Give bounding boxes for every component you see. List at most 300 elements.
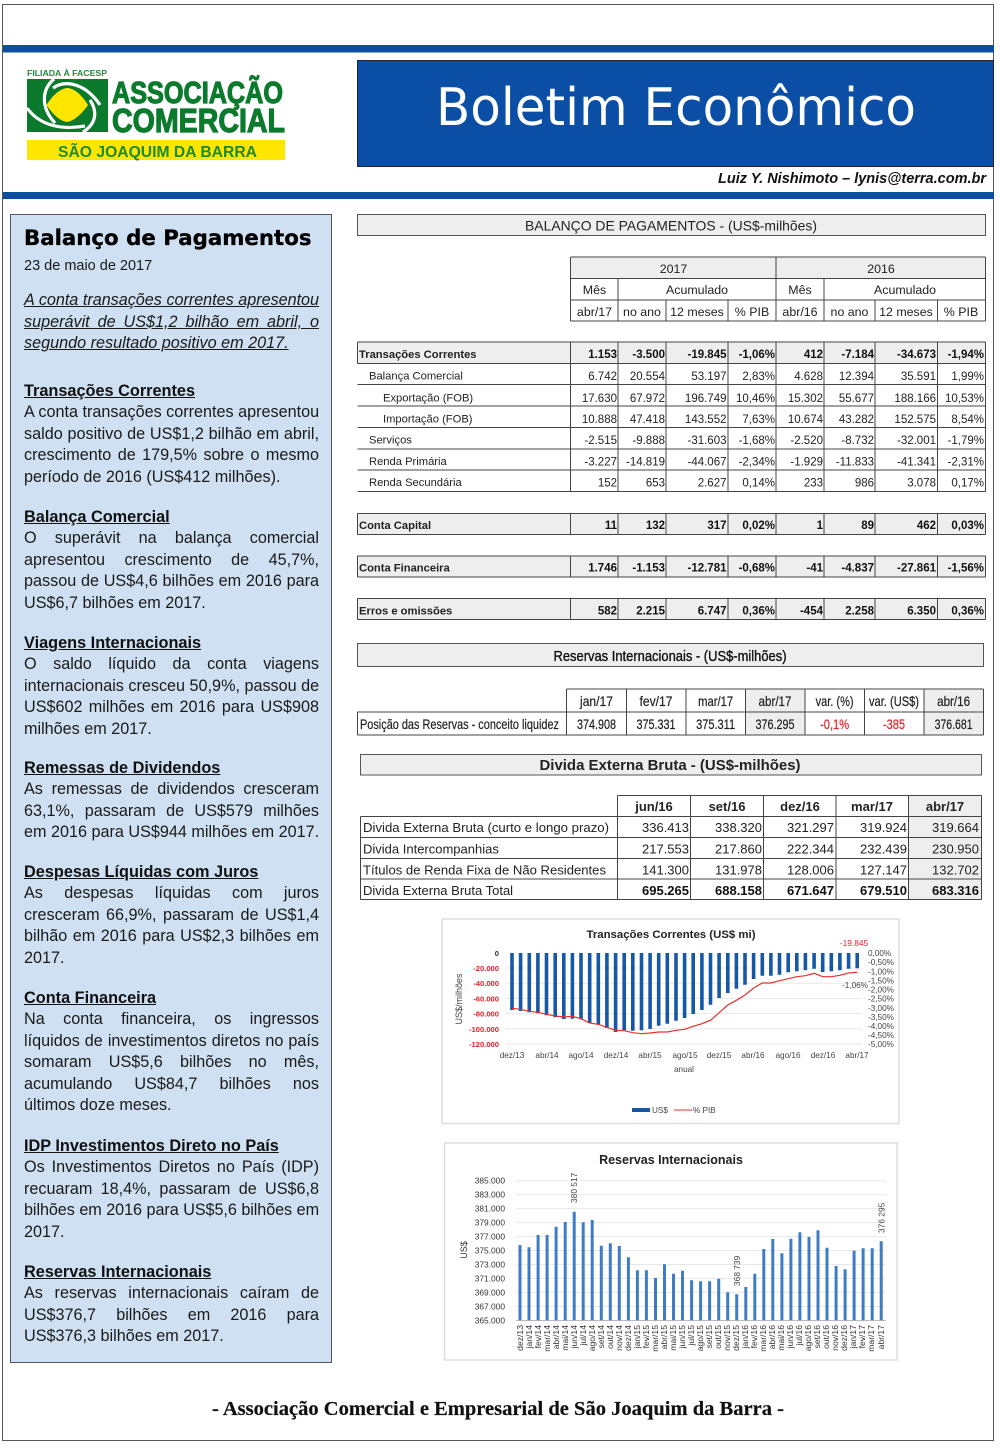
table: transações correntes: 10,46%: [736, 393, 775, 405]
table: dívida externa bruta: 127.147: [860, 862, 907, 878]
x axis month labels: ago/16: [803, 1325, 813, 1351]
right axis labels: -1,50%: [868, 976, 894, 985]
x axis month labels: mai/14: [560, 1325, 570, 1351]
table: dívida externa bruta: 141.300: [642, 862, 689, 878]
x axis month labels: abr/15: [659, 1325, 669, 1349]
x axis month labels: mar/15: [650, 1325, 660, 1352]
x axis labels: dez/13: [500, 1051, 525, 1060]
legend: [632, 1106, 716, 1115]
table: posição das reservas: 376.295: [756, 716, 795, 732]
x axis month labels: dez/13: [515, 1325, 525, 1351]
x axis month labels: dez/14: [623, 1325, 633, 1351]
data labels: 368 739: [732, 1255, 742, 1286]
heading: Reservas Internacionais table: [358, 644, 984, 666]
table row: conta financeira: Conta Financeira: [359, 562, 451, 574]
top blue rule: [3, 45, 994, 52]
table: dívida externa bruta: Títulos de Renda Fixa de Não Residentes: [363, 862, 607, 878]
logo name: ASSOCIAÇÃO: [112, 75, 283, 110]
text block: conta financeira: líquidos de investimentos diretos no país: [24, 1032, 319, 1050]
x axis month labels: [515, 1325, 886, 1352]
left axis labels: -120.000: [469, 1040, 499, 1049]
table: balanço de pagamentos column headers: abr/16: [782, 305, 818, 319]
table row: conta capital: 0,03%: [951, 520, 984, 532]
title banner: Boletim Econômico: [436, 78, 916, 138]
axis title: US$: [459, 1241, 469, 1259]
x axis labels: ago/15: [672, 1051, 698, 1060]
x axis month labels: jan/15: [632, 1325, 642, 1349]
table: dívida externa bruta: 230.950: [932, 842, 979, 856]
text block: balança comercial: US$6,7 bilhões em 2017.: [24, 594, 206, 612]
table row: conta capital: [358, 514, 986, 534]
text block: viagens internacionais: internacionais cresceu 50,9%, passou de: [24, 677, 319, 695]
text block: conta financeira: Na conta financeira, os ingressos: [24, 1010, 319, 1028]
panel: balanço de pagamentos summary: [10, 214, 332, 1363]
x axis month labels: out/14: [605, 1325, 615, 1349]
row: transações correntes values: -19.845: [687, 349, 727, 361]
table: dívida externa bruta: 321.297: [787, 820, 834, 835]
table: transações correntes: -9.888: [632, 435, 665, 447]
table row: erros e omissões: 2.258: [845, 606, 875, 618]
table: posição das reservas: abr/16: [937, 693, 970, 709]
table: transações correntes: 653: [646, 478, 665, 490]
table: transações correntes: 143.552: [685, 414, 726, 426]
table: transações correntes: 53.197: [691, 371, 726, 383]
right axis labels: [868, 949, 894, 1049]
table: transações correntes: -1,79%: [948, 435, 984, 447]
data labels: 376 295: [876, 1202, 886, 1233]
text block: IDP: 2017.: [24, 1223, 65, 1241]
table: transações correntes: 233: [804, 478, 823, 490]
x axis labels: abr/17: [845, 1051, 869, 1060]
table: balanço de pagamentos column headers: 2016: [867, 262, 895, 276]
y axis labels: 375.000: [475, 1246, 505, 1256]
chart: transações correntes: -1,06%: [842, 981, 868, 990]
axis title: US$/milhões: [454, 973, 464, 1025]
table: balanço de pagamentos column headers: Mês: [788, 283, 812, 297]
row: transações correntes values: -1,06%: [739, 349, 775, 361]
table: dívida externa bruta: [360, 796, 982, 900]
text block: reservas internacionais: Reservas Internacionais: [24, 1262, 211, 1280]
table: posição das reservas: fev/17: [640, 693, 673, 709]
table: transações correntes: -41.341: [897, 456, 936, 468]
x axis month labels: abr/14: [551, 1325, 561, 1349]
text block: conta financeira: [24, 988, 319, 1114]
text block: conta financeira: Conta Financeira: [24, 988, 156, 1006]
chart title: Transações Correntes (US$ mi): [586, 929, 756, 941]
lower blue rule: [3, 192, 994, 199]
table: dívida externa bruta: 232.439: [860, 842, 907, 856]
x axis labels: ago/14: [568, 1051, 594, 1060]
left axis labels: -60.000: [473, 994, 499, 1004]
table: balanço de pagamentos column headers: Mês: [583, 283, 606, 297]
rows: components: Serviços: [369, 434, 412, 446]
table: transações correntes: 43.282: [839, 414, 874, 426]
line: % PIB: [512, 972, 857, 1034]
text block: despesas líquidas com juros: Despesas Líquidas com Juros: [24, 862, 258, 880]
text block: viagens internacionais: O saldo líquido da conta viagens: [24, 655, 319, 673]
y axis labels: 369.000: [475, 1288, 505, 1298]
table row: erros e omissões: 6.747: [698, 606, 726, 618]
chart title: Reservas Internacionais: [599, 1153, 743, 1167]
text block: transações correntes: saldo positivo de US$1,2 bilhão em abril,: [24, 425, 319, 443]
row: transações correntes values: 1.153: [588, 349, 617, 361]
x axis month labels: nov/15: [722, 1325, 732, 1351]
text block: transações correntes: período de 2016 (US$412 milhões).: [24, 468, 280, 486]
table: balanço de pagamentos column headers: Acumulado: [666, 283, 728, 297]
x axis month labels: mar/16: [758, 1325, 768, 1352]
table: transações correntes: -14.819: [626, 456, 665, 468]
x axis month labels: fev/16: [749, 1325, 759, 1348]
text block: conta financeira: somaram US$5,6 bilhões no mês,: [24, 1053, 319, 1071]
table: dívida externa bruta: set/16: [709, 799, 745, 814]
table: transações correntes: 10.888: [582, 414, 617, 426]
right axis labels: -3,50%: [868, 1013, 894, 1022]
table row: conta capital: 132: [646, 520, 665, 532]
bars: reserves: [520, 1212, 881, 1320]
table: dívida externa bruta: 336.413: [642, 820, 689, 835]
table row: conta financeira: -0,68%: [739, 562, 775, 574]
rows: components: [369, 370, 473, 489]
y axis labels: 367.000: [475, 1302, 505, 1312]
text block: remessas de dividendos: Remessas de Dividendos: [24, 758, 220, 776]
table: balanço de pagamentos column headers: % PIB: [735, 305, 769, 319]
table: transações correntes: 2.627: [698, 478, 726, 490]
x axis month labels: mai/15: [668, 1325, 678, 1351]
x axis labels: dez/15: [707, 1051, 732, 1060]
text block: viagens internacionais: [24, 634, 319, 738]
author byline: Luiz Y. Nishimoto – lynis@terra.com.br: [718, 171, 987, 187]
text block: balança comercial: [24, 508, 319, 612]
table row: conta capital: 462: [917, 520, 936, 532]
table: posição das reservas: 375.331: [636, 716, 676, 732]
table: transações correntes: Transações Correntes: [359, 349, 477, 361]
table row: erros e omissões: Erros e omissões: [359, 606, 452, 618]
table: dívida externa bruta: 338.320: [715, 820, 762, 835]
x axis month labels: out/15: [713, 1325, 723, 1349]
table row: conta financeira: [358, 556, 986, 577]
table: transações correntes: 67.972: [630, 393, 665, 405]
text block: balança comercial: passou de US$4,6 bilhões em 2016 para: [24, 572, 319, 590]
table: balanço de pagamentos column headers: Acumulado: [874, 283, 936, 297]
heading: Balanço de Pagamentos table: BALANÇO DE PAGAMENTOS - (US$-milhões): [525, 218, 817, 234]
table row: conta financeira: -1,56%: [948, 562, 984, 574]
text block: conta financeira: acumulando US$84,7 bilhões nos: [24, 1075, 319, 1093]
x axis month labels: nov/16: [830, 1325, 840, 1351]
table: dívida externa bruta: 131.978: [715, 862, 762, 878]
data callouts: -19.845: [840, 938, 869, 948]
table row: conta capital: 89: [861, 520, 874, 532]
left axis labels: -80.000: [473, 1010, 499, 1018]
x axis labels: [500, 1051, 869, 1074]
text block: transações correntes: [24, 382, 319, 486]
table: transações correntes: -32.001: [897, 435, 936, 447]
y axis labels: 381.000: [475, 1204, 505, 1214]
table: dívida externa bruta: 222.344: [787, 842, 834, 856]
table: transações correntes: 4.628: [794, 371, 823, 383]
table row: conta financeira: -12.781: [687, 562, 727, 574]
title banner: [358, 60, 994, 166]
chart: reservas internacionais: [444, 1143, 897, 1360]
table: dívida externa bruta: dez/16: [780, 799, 820, 814]
table: dívida externa bruta: Divida Externa Bruta (curto e longo prazo): [363, 820, 609, 835]
x axis labels: dez/14: [604, 1051, 629, 1060]
table row: erros e omissões: 6.350: [907, 606, 936, 618]
x axis month labels: out/16: [821, 1325, 831, 1349]
table row: conta financeira: -27.861: [897, 562, 937, 574]
table: transações correntes: -3.227: [584, 456, 617, 468]
text block: transações correntes: Transações Correntes: [24, 382, 195, 400]
table row: conta financeira: 1.746: [588, 562, 617, 574]
x axis month labels: jul/16: [794, 1325, 804, 1347]
x axis month labels: ago/15: [695, 1325, 705, 1351]
table: transações correntes: -2,31%: [948, 456, 984, 468]
logo: Associação Comercial: [27, 69, 285, 161]
x axis month labels: mar/14: [542, 1325, 552, 1352]
heading: Divida Externa Bruta table: [360, 754, 982, 775]
right axis labels: -0,50%: [868, 958, 894, 967]
text block: balança comercial: apresentou crescimento de 45,7%,: [24, 551, 319, 569]
x axis labels: abr/15: [638, 1051, 662, 1060]
y axis labels: 379.000: [475, 1218, 505, 1228]
text block: remessas de dividendos: As remessas de dividendos cresceram: [24, 780, 319, 798]
table row: erros e omissões: 0,36%: [951, 606, 984, 618]
table: balanço de pagamentos column headers: abr/17: [577, 305, 612, 319]
logo city band: [27, 140, 285, 161]
x axis month labels: fev/15: [641, 1325, 651, 1348]
right axis labels: 0,00%: [868, 949, 891, 958]
text block: reservas internacionais: As reservas internacionais caíram de: [24, 1284, 319, 1302]
table: transações correntes: 10,53%: [945, 393, 984, 405]
table: transações correntes: -2,34%: [739, 456, 775, 468]
table row: erros e omissões: 582: [598, 606, 617, 618]
x axis month labels: jun/14: [569, 1325, 579, 1349]
logo city band: SÃO JOAQUIM DA BARRA: [58, 141, 257, 161]
x axis labels: anual: [674, 1065, 694, 1074]
table: transações correntes: 20.554: [630, 371, 666, 383]
row: transações correntes values: -1,94%: [948, 349, 984, 361]
rows: components: Renda Primária: [369, 456, 448, 468]
logo emblem: [27, 79, 108, 132]
right axis labels: -5,00%: [868, 1040, 894, 1049]
rows: components: Renda Secundária: [369, 477, 462, 489]
text block: IDP: [24, 1136, 319, 1241]
table: transações correntes: 15.302: [788, 393, 823, 405]
table: transações correntes: 12.394: [839, 371, 875, 383]
table: dívida externa bruta: 671.647: [787, 883, 834, 898]
text block: remessas de dividendos: [24, 758, 319, 841]
table: dívida externa bruta: 319.664: [932, 820, 979, 835]
table: dívida externa bruta: 679.510: [860, 883, 907, 898]
x axis month labels: mai/16: [776, 1325, 786, 1351]
text block: intro: segundo resultado positivo em 2017.: [24, 334, 289, 352]
table: posição das reservas: 376.681: [935, 716, 973, 732]
y axis labels: 365.000: [475, 1316, 505, 1326]
table: transações correntes: 0,17%: [951, 478, 984, 490]
table: transações correntes: 55.677: [839, 393, 874, 405]
data labels: 380 517: [569, 1172, 579, 1203]
text block: viagens internacionais: Viagens Internacionais: [24, 634, 201, 652]
x axis month labels: jul/14: [578, 1325, 588, 1347]
table: posição das reservas: mar/17: [698, 693, 733, 709]
text block: despesas líquidas com juros: As despesas líquidas com juros: [24, 884, 319, 902]
table: balanço de pagamentos column headers: no ano: [831, 305, 869, 319]
right axis labels: -1,00%: [868, 967, 894, 976]
table: dívida externa bruta: 217.860: [715, 842, 762, 856]
table: transações correntes: 196.749: [685, 393, 726, 405]
table: posição das reservas: [358, 689, 984, 735]
text block: IDP: bilhões em 2016 para US$5,6 bilhões em: [24, 1201, 319, 1219]
x axis month labels: dez/15: [731, 1325, 741, 1351]
table: dívida externa bruta: abr/17: [926, 799, 964, 814]
x axis labels: abr/16: [741, 1051, 765, 1060]
table row: erros e omissões: 0,36%: [742, 606, 775, 618]
table: transações correntes: 7,63%: [742, 414, 775, 426]
table row: conta financeira: -41: [806, 562, 824, 574]
x axis month labels: jul/15: [686, 1325, 696, 1347]
table: transações correntes: -1.929: [790, 456, 823, 468]
table row: conta capital: 0,02%: [742, 520, 775, 532]
x axis month labels: set/16: [812, 1325, 822, 1348]
rows: components: Importação (FOB): [383, 414, 473, 426]
text block: balança comercial: Balança Comercial: [24, 508, 170, 526]
legend: US$: [652, 1106, 668, 1115]
table: dívida externa bruta: mar/17: [851, 799, 893, 814]
left axis labels: -40.000: [473, 979, 499, 988]
table: balanço de pagamentos column headers: 12 meses: [670, 305, 724, 319]
text block: IDP: recuaram 18,4%, passaram de US$6,8: [24, 1180, 319, 1198]
table: transações correntes: 3.078: [907, 478, 936, 490]
x axis labels: dez/16: [811, 1051, 836, 1060]
table: transações correntes: 188.166: [894, 393, 936, 405]
table: balanço de pagamentos column headers: 2017: [660, 262, 687, 276]
rows: components: Balança Comercial: [369, 370, 463, 382]
logo affiliation text: FILIADA À FACESP: [27, 69, 108, 78]
text block: despesas líquidas com juros: bilhão em 2016 para US$2,3 bilhões em: [24, 927, 319, 945]
x axis month labels: jan/17: [848, 1325, 858, 1349]
footer: - Associação Comercial e Empresarial de São Joaquim da Barra -: [212, 1398, 784, 1420]
x axis month labels: ago/14: [587, 1325, 597, 1351]
text block: reservas internacionais: US$376,3 bilhões em 2017.: [24, 1327, 224, 1345]
x axis month labels: set/14: [596, 1325, 606, 1348]
table: transações correntes: [358, 342, 986, 492]
table: transações correntes: -44.067: [687, 456, 726, 468]
table: dívida externa bruta: 319.924: [860, 820, 907, 835]
table: transações correntes: 152.575: [894, 414, 936, 426]
table: posição das reservas: -0,1%: [820, 716, 849, 732]
table: transações correntes: -1,68%: [739, 435, 775, 447]
table: balanço de pagamentos column headers: no ano: [623, 305, 661, 319]
x axis month labels: dez/16: [839, 1325, 849, 1351]
row: transações correntes values: -7.184: [841, 349, 875, 361]
table: posição das reservas: abr/17: [758, 693, 792, 709]
table: posição das reservas: var. (US$): [869, 693, 919, 709]
table: transações correntes: -8.732: [841, 435, 874, 447]
table: balanço de pagamentos column headers: 12 meses: [879, 305, 933, 319]
table: transações correntes: 8,54%: [951, 414, 984, 426]
right axis labels: -2,50%: [868, 995, 894, 1004]
x axis month labels: mar/17: [866, 1325, 876, 1352]
table: posição das reservas: 375.311: [696, 716, 735, 732]
x axis month labels: abr/16: [767, 1325, 777, 1349]
table: posição das reservas: Posição das Reservas - conceito liquidez: [360, 716, 559, 732]
bars: US$: [512, 953, 857, 1032]
table: posição das reservas: jan/17: [579, 693, 613, 709]
y axis labels: 377.000: [475, 1232, 505, 1242]
table: balanço de pagamentos column headers: % PIB: [944, 305, 978, 319]
heading: Divida Externa Bruta table: Divida Externa Bruta - (US$-milhões): [540, 758, 801, 774]
heading: Reservas Internacionais table: Reservas Internacionais - (US$-milhões): [554, 649, 786, 665]
table row: erros e omissões: 2.215: [636, 606, 666, 618]
table: transações correntes: -11.833: [836, 456, 874, 468]
text block: remessas de dividendos: 63,1%, passaram de US$579 milhões: [24, 802, 319, 820]
left axis labels: 0: [495, 949, 499, 958]
table: dívida externa bruta: jun/16: [634, 799, 673, 814]
table: transações correntes: 1,99%: [951, 371, 984, 383]
table: dívida externa bruta: 128.006: [787, 862, 834, 878]
text block: transações correntes: crescimento de 179,5% sobre o mesmo: [24, 446, 319, 464]
x axis labels: abr/14: [535, 1051, 559, 1060]
table row: conta capital: Conta Capital: [359, 520, 431, 532]
y axis labels: 385.000: [475, 1176, 505, 1186]
table: dívida externa bruta: Divida Externa Bruta Total: [363, 883, 513, 898]
table row: conta capital: 317: [707, 520, 726, 532]
row: transações correntes values: 412: [804, 349, 823, 361]
row: transações correntes values: [588, 349, 984, 361]
table: transações correntes: -2.515: [584, 435, 617, 447]
text block: conta financeira: últimos doze meses.: [24, 1096, 172, 1114]
x axis month labels: set/15: [704, 1325, 714, 1348]
table: posição das reservas: 374.908: [577, 716, 616, 732]
table row: erros e omissões: [358, 598, 986, 620]
rows: components: Exportação (FOB): [383, 392, 473, 404]
y axis labels: 373.000: [475, 1260, 505, 1270]
text block: despesas líquidas com juros: [24, 862, 319, 967]
chart: transações correntes: [442, 919, 899, 1124]
table row: conta financeira: -1.153: [632, 562, 665, 574]
panel date: 23 de maio de 2017: [24, 258, 152, 274]
x axis month labels: jun/15: [677, 1325, 687, 1349]
data labels: [569, 1172, 886, 1286]
x axis month labels: nov/14: [614, 1325, 624, 1351]
right axis labels: -3,00%: [868, 1004, 894, 1013]
heading: Balanço de Pagamentos table: [358, 214, 986, 236]
table row: erros e omissões: -454: [800, 606, 824, 618]
table row: conta financeira: -4.837: [841, 562, 874, 574]
panel heading: Balanço de Pagamentos: [24, 226, 312, 250]
right axis labels: -4,50%: [868, 1031, 894, 1040]
text block: IDP: IDP Investimentos Direto no País: [24, 1136, 279, 1154]
text block: intro: A conta transações correntes apresentou: [24, 291, 319, 309]
x axis labels: ago/16: [775, 1051, 801, 1060]
table: transações correntes: 10.674: [788, 414, 824, 426]
table: transações correntes: -31.603: [687, 435, 726, 447]
table: transações correntes: 986: [855, 478, 874, 490]
table: transações correntes: 47.418: [630, 414, 665, 426]
table: transações correntes: 152: [598, 478, 617, 490]
row: transações correntes values: -3.500: [632, 349, 665, 361]
text block: intro: superávit de US$1,2 bilhão em abril, o: [24, 313, 319, 331]
x axis month labels: jun/16: [785, 1325, 795, 1349]
table: transações correntes: 0,14%: [742, 478, 775, 490]
x axis month labels: jan/14: [524, 1325, 534, 1349]
table: dívida externa bruta: 688.158: [715, 883, 762, 898]
table: transações correntes: 6.742: [588, 371, 617, 383]
x axis month labels: jan/16: [740, 1325, 750, 1349]
row: transações correntes values: -34.673: [897, 349, 936, 361]
text block: remessas de dividendos: em 2016 para US$944 milhões em 2017.: [24, 823, 319, 841]
right axis labels: -2,00%: [868, 986, 894, 994]
logo: Associação Comercial: COMERCIAL: [112, 102, 285, 139]
